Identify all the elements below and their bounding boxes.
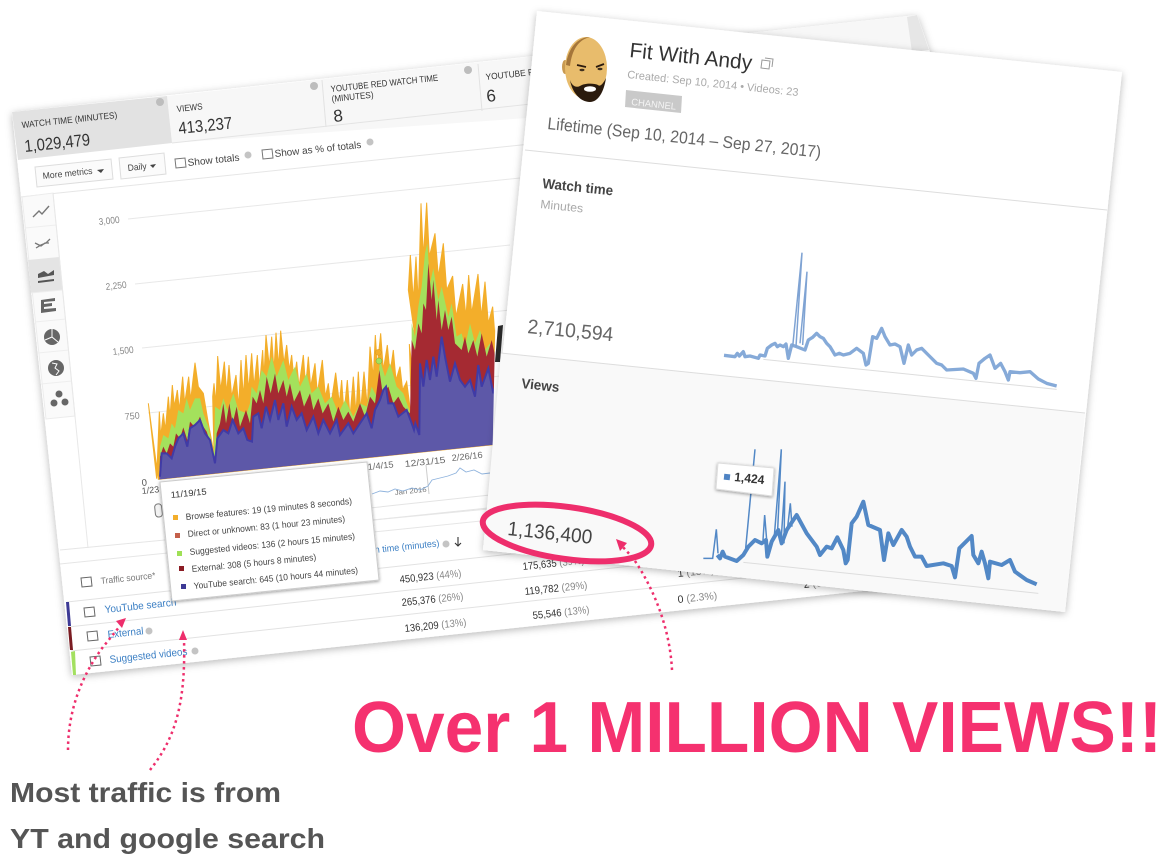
chart y-axis labels and grid xyxy=(98,178,520,496)
watch time heading xyxy=(540,175,614,215)
panel: YouTube analytics report card xyxy=(12,15,985,675)
toolbar controls: More metrics xyxy=(42,166,93,181)
metric: YouTube Red watch time: (MINUTES) xyxy=(331,90,374,104)
chart navigator: 12/31/15 xyxy=(404,455,446,469)
watch time heading: Watch time xyxy=(542,175,614,198)
chart navigator: 1/4/15 xyxy=(367,459,394,472)
chart y-axis labels and grid: 750 xyxy=(124,410,140,423)
annotation text xyxy=(10,777,325,854)
chart tooltip: YouTube search: 645 (10 hours 44 minutes) xyxy=(193,565,358,591)
toolbar controls: Daily xyxy=(127,161,148,173)
channel name: Fit With Andy xyxy=(628,39,754,75)
chart tooltip xyxy=(160,462,379,601)
channel badge xyxy=(625,90,682,113)
chart y-axis labels and grid: 0 xyxy=(141,477,148,489)
chart navigator xyxy=(154,325,503,520)
views total: 1,136,400 xyxy=(506,518,593,549)
metric: YouTube Red watch time: 8 xyxy=(332,106,344,126)
traffic source table: 450,923 (44%) xyxy=(399,568,462,586)
toolbar controls: Show as % of totals xyxy=(274,140,362,160)
icon: channel avatar cartoon xyxy=(562,37,607,102)
watch time heading: Minutes xyxy=(540,197,584,215)
metric: watch time xyxy=(21,110,118,156)
views heading: Views xyxy=(521,375,560,395)
annotation text: Most traffic is from xyxy=(10,777,281,808)
traffic source table: 55,546 (13%) xyxy=(532,604,590,622)
metric: views: 413,237 xyxy=(177,113,233,138)
metric tabs strip xyxy=(12,15,929,160)
traffic source table: 265,376 (26%) xyxy=(401,591,464,609)
traffic source table xyxy=(60,506,900,675)
line chart: watch time xyxy=(724,253,1057,389)
chart navigator: 2/26/16 xyxy=(451,450,483,463)
traffic source table: 2 (0%) xyxy=(803,576,835,591)
metric: YouTube Red views: 6 xyxy=(485,86,497,106)
channel badge: CHANNEL xyxy=(631,97,677,113)
chart tooltip: Suggested videos: 136 (2 hours 15 minutes) xyxy=(189,531,355,557)
area: suggested videos xyxy=(159,243,503,479)
chart y-axis labels and grid: 3,000 xyxy=(98,215,120,228)
watch time total: 2,710,594 xyxy=(527,316,614,346)
area: browse features xyxy=(148,203,503,479)
area: YouTube search xyxy=(159,337,503,479)
channel meta: Created: Sep 10, 2014 • Videos: 23 xyxy=(627,69,799,99)
chart tooltip: Direct or unknown: 83 (1 hour 23 minutes) xyxy=(187,514,345,539)
traffic source table: 136,209 (13%) xyxy=(404,617,467,635)
metric: YouTube Red views: YOUTUBE RED xyxy=(485,66,546,82)
traffic source table: 1 (15%) xyxy=(677,564,715,580)
chart tooltip: Browse features: 19 (19 minutes 8 seconds) xyxy=(185,496,352,522)
tooltip: 1,424 xyxy=(716,463,774,496)
traffic source table: YouTube search xyxy=(104,597,177,616)
chart tooltip: External: 308 (5 hours 8 minutes) xyxy=(191,552,317,574)
traffic source table: Traffic source* xyxy=(100,570,156,586)
traffic source table: 119,782 (29%) xyxy=(524,579,588,598)
chart navigator: Jan 2016 xyxy=(394,487,427,497)
area: external xyxy=(159,263,503,479)
metric: YouTube Red watch time: YOUTUBE RED WATCH TIME xyxy=(330,73,439,94)
chart y-axis labels and grid: 1/23 xyxy=(141,484,160,496)
chart y-axis labels and grid: 1,500 xyxy=(112,345,134,358)
traffic source table: 175,635 (39%) xyxy=(522,555,585,573)
stacked area chart: traffic sources xyxy=(148,203,503,479)
traffic source table: h time (minutes) xyxy=(374,538,440,556)
annotation text: YT and google search xyxy=(10,823,325,854)
chart tooltip: 11/19/15 xyxy=(170,487,207,500)
arrow: to views total xyxy=(616,539,672,670)
metric: YouTube Red watch time xyxy=(330,73,439,126)
toolbar controls xyxy=(20,138,540,197)
metric: views xyxy=(176,101,233,138)
traffic source table: 0 (2.3%) xyxy=(677,590,718,606)
line chart: views xyxy=(703,449,1038,593)
panel: channel lifetime summary card xyxy=(483,11,1122,612)
metric: YouTube Red views xyxy=(485,66,546,106)
arrow: to YouTube search row xyxy=(68,618,126,750)
lifetime date range: Lifetime (Sep 10, 2014 – Sep 27, 2017) xyxy=(547,114,822,162)
traffic source table: Suggested videos xyxy=(109,646,188,666)
traffic source table: External xyxy=(107,625,144,641)
chart y-axis labels and grid: 2,250 xyxy=(105,280,127,293)
toolbar controls: Show totals xyxy=(187,153,240,169)
metric: watch time: WATCH TIME (MINUTES) xyxy=(21,110,118,130)
callout: ellipse around views total xyxy=(479,495,655,571)
tooltip: 1,424: 1,424 xyxy=(734,470,765,487)
views section background xyxy=(483,353,1085,612)
chart type icon rail xyxy=(22,193,88,548)
arrow: to External row xyxy=(150,630,187,770)
line: YouTube search top edge xyxy=(160,337,503,477)
metric: watch time: 1,029,479 xyxy=(23,130,91,156)
metric: views: VIEWS xyxy=(176,101,203,114)
